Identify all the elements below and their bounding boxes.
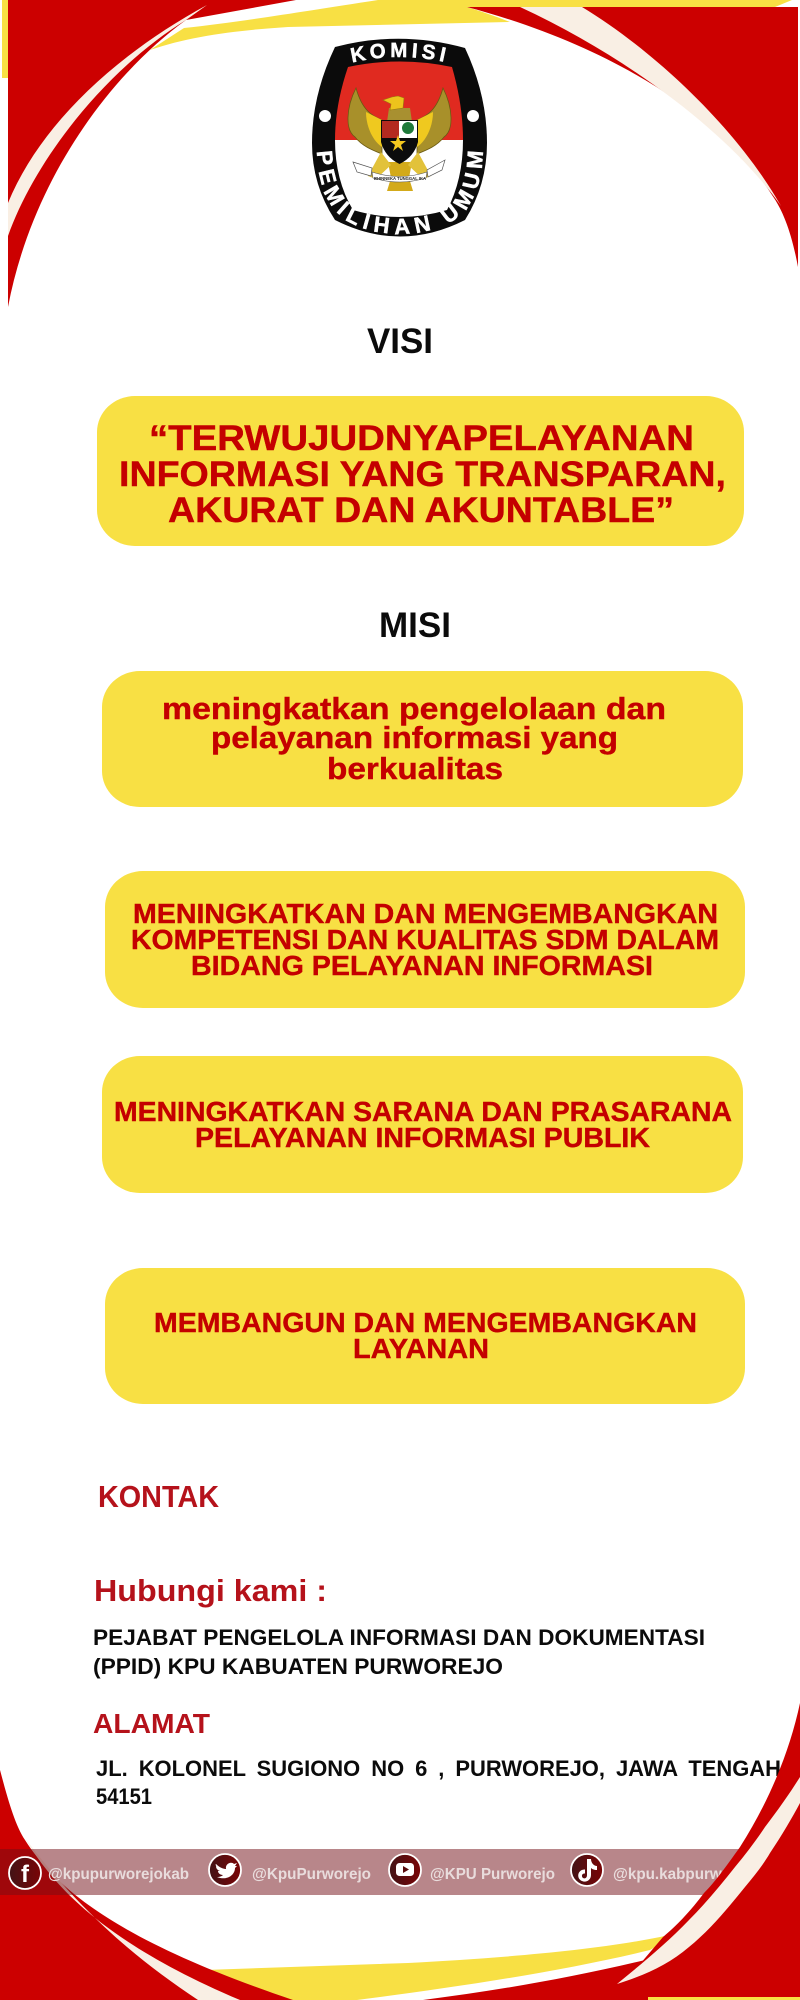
facebook handle: f — [21, 1861, 30, 1888]
logo outer black badge — [312, 39, 487, 236]
bottom-left red and cream swoosh — [0, 1770, 293, 2000]
text block: alamat: 54151 — [96, 1784, 152, 1809]
panel: visi statement — [97, 396, 744, 546]
panel: misi 3 — [102, 1056, 743, 1193]
youtube handle: @KPU Purworejo — [430, 1866, 555, 1883]
social media bar — [0, 1849, 800, 1895]
logo: KPU emblem — [312, 38, 487, 236]
twitter handle — [209, 1854, 371, 1886]
text block: PPID — [93, 1625, 705, 1679]
panel: misi 4: MEMBANGUN DAN MENGEMBANGKAN — [154, 1307, 697, 1338]
bottom-right wedge, background layer — [423, 1960, 800, 2000]
text block: alamat: JL. KOLONEL SUGIONO NO 6 , PURWOREJO, JAWA TENGAH — [96, 1756, 781, 1781]
logo garuda — [348, 88, 451, 191]
logo text KOMISI: KOMISI — [350, 42, 446, 62]
heading: MISI: MISI — [379, 606, 451, 645]
panel: misi 1 — [102, 671, 743, 807]
panel: misi 2 — [105, 871, 745, 1008]
text block: PPID: (PPID) KPU KABUATEN PURWOREJO — [93, 1654, 503, 1679]
twitter handle: @KpuPurworejo — [252, 1866, 371, 1883]
text block: PPID: PEJABAT PENGELOLA INFORMASI DAN DOKUMENTASI — [93, 1625, 705, 1650]
panel: misi 1: meningkatkan pengelolaan dan — [162, 691, 666, 726]
logo red upper field — [335, 62, 463, 140]
logo white lower field — [335, 140, 463, 217]
panel: misi 4 — [105, 1268, 745, 1404]
facebook handle — [9, 1857, 189, 1889]
panel: visi statement: AKURAT DAN AKUNTABLE” — [168, 491, 674, 530]
panel: misi 2: MENINGKATKAN DAN MENGEMBANGKAN — [133, 898, 718, 929]
tiktok handle — [571, 1854, 759, 1886]
bottom-right red and cream swoosh, front layer — [617, 1703, 800, 2000]
heading: Hubungi kami: Hubungi kami : — [94, 1574, 327, 1608]
top-left red and cream swoosh — [8, 0, 296, 307]
panel: misi 3: MENINGKATKAN SARANA DAN PRASARANA — [114, 1096, 732, 1127]
logo side dots — [319, 110, 479, 122]
facebook handle: @kpupurworejokab — [48, 1866, 189, 1883]
panel: visi statement: “TERWUJUDNYAPELAYANAN — [149, 419, 694, 458]
top-right red and cream swoosh — [467, 7, 798, 267]
text block: alamat — [96, 1756, 781, 1809]
top yellow swoosh — [2, 0, 792, 78]
panel: misi 1: berkualitas — [327, 751, 503, 786]
heading: KONTAK: KONTAK — [98, 1480, 219, 1514]
youtube handle — [389, 1854, 555, 1886]
heading: VISI: VISI — [367, 322, 433, 361]
panel: misi 4: LAYANAN — [353, 1333, 489, 1364]
tiktok handle: @kpu.kabpurworejo — [613, 1866, 759, 1883]
panel: misi 1: pelayanan informasi yang — [211, 720, 618, 755]
panel: misi 2: BIDANG PELAYANAN INFORMASI — [191, 950, 653, 981]
logo shield — [381, 120, 418, 164]
logo text PEMILIHAN UMUM: PEMILIHAN UMUM — [316, 151, 484, 235]
heading: ALAMAT: ALAMAT — [93, 1708, 210, 1739]
logo garuda: BHINNEKA TUNGGAL IKA — [374, 176, 426, 181]
panel: misi 3: PELAYANAN INFORMASI PUBLIK — [195, 1122, 650, 1153]
panel: visi statement: INFORMASI YANG TRANSPARAN, — [119, 455, 726, 494]
panel: misi 2: KOMPETENSI DAN KUALITAS SDM DALAM — [131, 924, 719, 955]
bottom yellow swoosh — [205, 1932, 682, 2000]
